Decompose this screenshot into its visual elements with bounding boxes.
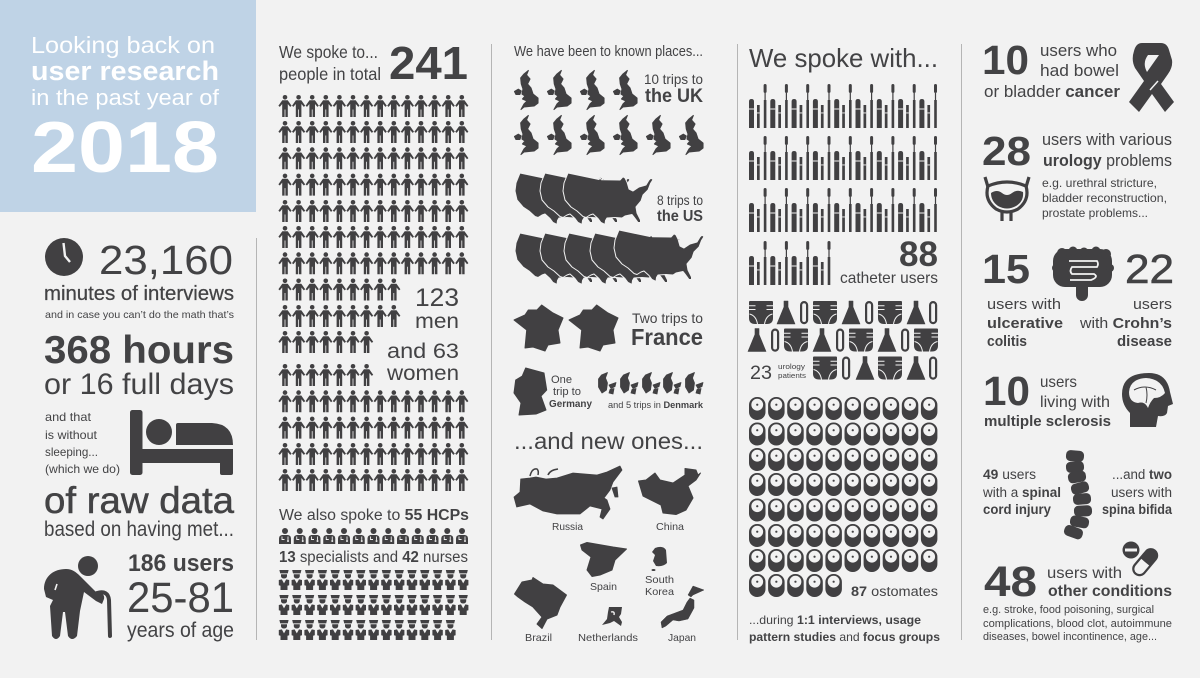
methods note [749, 613, 940, 644]
pictogram: specialists [279, 528, 468, 544]
Japan label: Japan [668, 632, 696, 644]
crohn's caption: disease [1117, 333, 1172, 350]
other conditions caption: other conditions [1048, 583, 1172, 600]
spina bifida caption: users with [1111, 485, 1172, 500]
title panel [0, 0, 256, 212]
heading: we spoke to: We spoke to... [279, 42, 378, 62]
spinal cord caption: cord injury [983, 502, 1051, 517]
cancer figure: 10 [982, 37, 1029, 83]
women label: women [386, 362, 459, 385]
catheter users figure: 88 [899, 235, 938, 274]
title panel: in the past year of [31, 85, 220, 110]
pictogram: urology products [748, 301, 938, 380]
US label: 8 trips to [657, 193, 703, 208]
title panel: 2018 [31, 108, 219, 188]
cancer caption: users who [1040, 41, 1117, 60]
Germany label: trip to [553, 386, 581, 398]
minutes caption: minutes of interviews [44, 283, 234, 305]
sleeping note: and that [45, 410, 92, 424]
icon: bladder [985, 177, 1029, 221]
pictogram: Denmark maps [598, 372, 703, 394]
women label: and 63 [387, 340, 459, 363]
catheter users label: catheter users [840, 270, 938, 287]
icon: Japan map [661, 586, 704, 628]
urology examples: prostate problems... [1042, 206, 1148, 220]
spina bifida caption [1102, 467, 1172, 517]
icon: Brazil map [514, 578, 566, 628]
urology patients label: urology [778, 362, 805, 371]
based on: based on having met... [44, 518, 234, 541]
UK label: the UK [645, 86, 703, 107]
multiple sclerosis figure: 10 [983, 368, 1030, 414]
urology patients label: 23 [750, 363, 772, 384]
France label [631, 310, 703, 350]
urology patients label [750, 362, 806, 384]
raw data: of raw data [44, 480, 234, 521]
other conditions caption [1047, 565, 1172, 600]
specialists and nurses caption: 13 specialists and 42 nurses [279, 549, 468, 566]
multiple sclerosis caption: users [1040, 374, 1077, 391]
crohn's caption: with Crohn’s [1079, 315, 1172, 332]
icon: clock [45, 238, 83, 276]
crohn's caption [1079, 296, 1172, 350]
men label [415, 284, 459, 333]
spinal cord caption [982, 467, 1061, 517]
South Korea label [645, 574, 674, 598]
ostomates label: 87 ostomates [851, 584, 938, 599]
crohn's figure: 22 [1125, 246, 1174, 292]
heading: we spoke with: We spoke with... [749, 43, 938, 73]
icon: pills [1122, 542, 1160, 578]
pictogram: US maps row two [515, 230, 704, 284]
icon: South Korea map [652, 547, 667, 571]
other conditions examples [983, 604, 1172, 643]
other conditions caption: users with [1047, 565, 1122, 582]
other conditions examples: diseases, bowel incontinence, age... [983, 631, 1157, 643]
icon: bed [130, 410, 233, 475]
heading: new ones: ...and new ones... [514, 428, 703, 454]
icon: head with brain [1122, 373, 1173, 427]
sleeping note: (which we do) [45, 462, 120, 476]
South Korea label: Korea [645, 586, 674, 598]
sleeping note: sleeping... [45, 445, 98, 459]
South Korea label: South [645, 574, 674, 586]
HCP heading: We also spoke to 55 HCPs [279, 507, 469, 524]
full days: or 16 full days [44, 368, 234, 401]
pictogram: nurses [279, 570, 468, 640]
heading: known places: We have been to known places... [514, 44, 703, 60]
pictogram: ostomy bags [749, 397, 937, 597]
Germany label: One [551, 374, 572, 386]
urology figure: 28 [982, 128, 1031, 174]
minutes figure: 23,160 [99, 237, 233, 283]
cancer caption [984, 41, 1120, 101]
users count: 186 users [128, 550, 234, 577]
urology caption: users with various [1042, 130, 1172, 149]
urology examples: bladder reconstruction, [1042, 191, 1167, 205]
colitis caption: ulcerative [987, 315, 1063, 332]
pictogram: France maps [514, 305, 618, 351]
title panel: Looking back on [31, 32, 215, 58]
urology patients label: patients [778, 371, 806, 380]
Brazil label: Brazil [525, 632, 552, 644]
icon: intestines [1052, 246, 1114, 301]
Spain label: Spain [590, 581, 617, 593]
years of age: years of age [127, 619, 234, 642]
men label: 123 [415, 284, 459, 312]
France label: Two trips to [632, 310, 703, 326]
methods note: pattern studies and focus groups [749, 630, 940, 644]
colitis figure: 15 [982, 246, 1030, 292]
colitis caption [987, 296, 1063, 350]
spinal cord caption: 49 users [983, 467, 1036, 482]
icon: China map [638, 468, 700, 514]
heading: we spoke to: people in total [279, 64, 381, 84]
heading: we spoke to [279, 42, 381, 84]
other conditions examples: complications, blood clot, autoimmune [983, 618, 1172, 630]
UK label: 10 trips to [644, 71, 703, 87]
spina bifida caption: ...and two [1112, 467, 1172, 482]
cancer caption: or bladder cancer [984, 82, 1120, 101]
cancer caption: had bowel [1040, 61, 1119, 80]
sleeping note [45, 410, 120, 476]
Germany label [549, 374, 592, 410]
urology caption: urology problems [1043, 151, 1172, 170]
pictogram: men [278, 95, 468, 353]
methods note: ...during 1:1 interviews, usage [749, 613, 921, 627]
icon: Spain map [580, 542, 626, 576]
icon: spine [1063, 450, 1092, 541]
women label [386, 340, 459, 385]
Netherlands label: Netherlands [578, 632, 638, 644]
title panel: user research [31, 56, 219, 86]
urology examples [1042, 176, 1167, 220]
age range: 25-81 [127, 574, 234, 622]
Russia label: Russia [552, 521, 583, 533]
icon: Russia map [514, 466, 622, 519]
UK label [644, 71, 703, 107]
pictogram: catheters [749, 84, 937, 285]
icon: Germany map [514, 368, 547, 415]
hours figure: 368 hours [44, 329, 234, 372]
figure: 241: 241 [389, 37, 468, 89]
math note: and in case you can’t do the math that’s [45, 309, 234, 321]
spina bifida caption: spina bifida [1102, 502, 1172, 517]
icon: awareness ribbon [1129, 43, 1174, 112]
pictogram: US maps row one [515, 173, 653, 224]
Denmark label: and 5 trips in Denmark [608, 400, 704, 411]
pictogram: UK maps [514, 70, 703, 154]
sleeping note: is without [45, 428, 98, 442]
other conditions figure: 48 [984, 558, 1037, 606]
men label: men [415, 310, 459, 333]
Germany label: Germany [549, 399, 592, 410]
multiple sclerosis caption [984, 374, 1111, 430]
US label [657, 193, 703, 225]
crohn's caption: users [1133, 296, 1172, 313]
colitis caption: colitis [987, 333, 1027, 350]
France label: France [631, 324, 703, 350]
urology caption [1042, 130, 1172, 170]
urology examples: e.g. urethral stricture, [1042, 176, 1157, 190]
China label: China [656, 521, 684, 533]
other conditions examples: e.g. stroke, food poisoning, surgical [983, 604, 1154, 616]
colitis caption: users with [987, 296, 1061, 313]
multiple sclerosis caption: living with [1040, 394, 1110, 411]
multiple sclerosis caption: multiple sclerosis [984, 413, 1111, 430]
pictogram: women [278, 364, 468, 491]
icon: elderly person [44, 556, 110, 639]
icon: Netherlands map [602, 607, 622, 626]
US label: the US [657, 208, 703, 225]
spinal cord caption: with a spinal [982, 485, 1061, 500]
